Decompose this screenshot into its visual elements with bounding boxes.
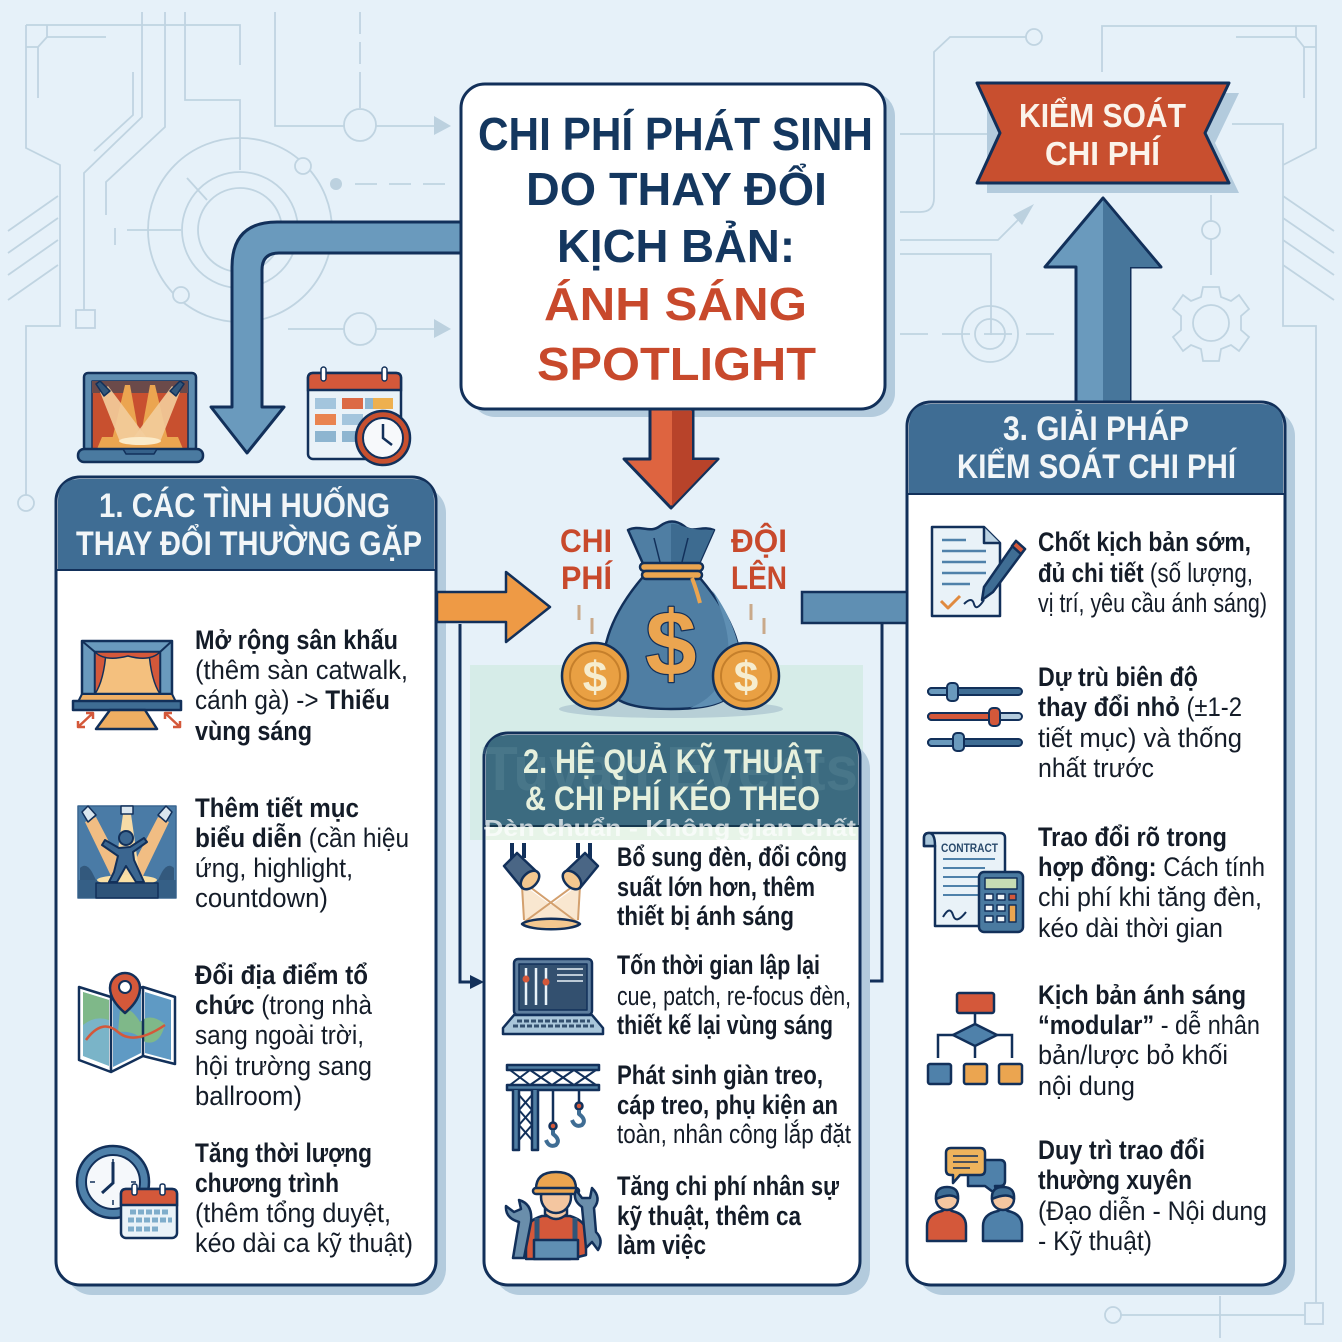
text: regular communication: Duy trì trao đổi	[1038, 1135, 1205, 1165]
text: expand stage: cánh gà) -> Thiếu	[195, 685, 390, 715]
text: change venue	[195, 960, 373, 1111]
text: extra performances: ứng, highlight,	[195, 853, 353, 883]
icon: sliders	[928, 683, 1022, 751]
text: reprogramming time	[617, 950, 851, 1040]
label: đội lên: LÊN	[731, 560, 787, 596]
text: extra performances: biểu diễn (cần hiệu	[195, 822, 409, 853]
text: regular communication: thường xuyên	[1038, 1165, 1192, 1195]
panel 2 header	[482, 735, 860, 841]
text: extra truss: toàn, nhân công lắp đặt	[617, 1118, 851, 1149]
panel 3 header: 3. GIẢI PHÁP	[1003, 410, 1189, 448]
text: extra performances: Thêm tiết mục	[195, 793, 359, 823]
icon: contract and calculator	[924, 833, 1023, 932]
icon: money bag with coins: $	[734, 653, 758, 702]
arrow: panel 1 to cost bag	[437, 572, 550, 642]
title panel: DO THAY ĐỔI	[526, 163, 827, 215]
panel 3 header	[907, 404, 1285, 494]
arrow: title to panel 1	[211, 222, 462, 453]
panel 1 header: 1. CÁC TÌNH HUỐNG	[99, 486, 390, 525]
icon: money bag with coins: $	[583, 653, 607, 702]
watermark tint	[470, 665, 863, 840]
panel 1 header: THAY ĐỔI THƯỜNG GẶP	[76, 525, 422, 563]
banner: cost control	[977, 83, 1239, 193]
icon: calendar with clock	[308, 367, 410, 465]
text: change venue: sang ngoài trời,	[195, 1020, 364, 1050]
title panel	[461, 84, 895, 417]
text: longer programme: kéo dài ca kỹ thuật)	[195, 1228, 413, 1258]
title panel: KỊCH BẢN:	[557, 220, 795, 272]
banner: cost control: KIỂM SOÁT	[1019, 97, 1186, 134]
panel 2 header: & CHI PHÍ KÉO THEO	[525, 780, 820, 818]
text: clear contract: Trao đổi rõ trong	[1038, 822, 1227, 852]
text: crew cost: Tăng chi phí nhân sự	[617, 1171, 839, 1201]
icon: performer on stage	[78, 806, 176, 898]
text: small change margin: Dự trù biên độ	[1038, 662, 1198, 692]
text: extra truss	[617, 1060, 851, 1149]
title panel: CHI PHÍ PHÁT SINH	[478, 108, 873, 160]
text: crew cost: làm việc	[617, 1230, 706, 1260]
text: crew cost	[617, 1171, 839, 1260]
text: small change margin	[1038, 662, 1242, 783]
label: chi phí	[560, 523, 613, 596]
icon: two people talking	[927, 1148, 1022, 1241]
text: modular script: nội dung	[1038, 1071, 1135, 1101]
label: đội lên: ĐỘI	[731, 523, 787, 559]
text: clear contract	[1038, 822, 1265, 943]
panel 2 header: Đèn chuẩn - Không gian chất	[484, 815, 856, 841]
text: clear contract: hợp đồng: Cách tính	[1038, 852, 1265, 882]
text: change venue: chức (trong nhà	[195, 990, 373, 1020]
text: finalize script early: đủ chi tiết (số lượng,	[1038, 558, 1253, 588]
icon: money bag with coins: $	[645, 593, 697, 695]
text: extra performances	[195, 793, 409, 913]
panel 1: common change situations	[56, 477, 446, 1295]
text: clear contract: kéo dài thời gian	[1038, 913, 1223, 943]
text: more lights	[617, 842, 847, 931]
title panel: ÁNH SÁNG	[544, 278, 807, 330]
panel 3: cost control solutions	[907, 402, 1295, 1295]
icon: flowchart	[928, 993, 1022, 1084]
label: chi phí: CHI	[560, 523, 612, 559]
connector: panel 1 to panel 2	[460, 624, 484, 989]
panel 2 header: Tuvan Events	[482, 735, 858, 804]
icon: contract and calculator: CONTRACT	[941, 841, 999, 855]
text: change venue: Đổi địa điểm tổ	[195, 960, 368, 990]
text: more lights: suất lớn hơn, thêm	[617, 872, 815, 902]
text: small change margin: nhất trước	[1038, 753, 1154, 783]
panel 2: technical consequences and costs	[482, 733, 870, 1295]
arrow: up to cost control	[1045, 198, 1161, 402]
text: regular communication: (Đạo diễn - Nội dung	[1038, 1195, 1267, 1226]
text: expand stage: Mở rộng sân khấu	[195, 625, 398, 655]
text: finalize script early: vị trí, yêu cầu ánh sáng)	[1038, 588, 1267, 618]
text: modular script: Kịch bản ánh sáng	[1038, 980, 1246, 1010]
icon: technician with wrenches	[506, 1172, 601, 1259]
icon: map with pin	[79, 973, 175, 1072]
text: clear contract: chi phí khi tăng đèn,	[1038, 882, 1262, 912]
banner: cost control: CHI PHÍ	[1045, 135, 1161, 172]
icon: laptop with stage lights	[78, 373, 203, 462]
text: modular script	[1038, 980, 1260, 1101]
text: longer programme: (thêm tổng duyệt,	[195, 1198, 391, 1228]
text: expand stage: (thêm sàn catwalk,	[195, 655, 408, 685]
icon: document and pen	[932, 527, 1025, 616]
label: chi phí: PHÍ	[561, 560, 613, 596]
connector: cost bag to panel 3	[802, 592, 907, 981]
text: expand stage	[195, 625, 408, 746]
icon: truss with hooks	[507, 1065, 599, 1150]
text: regular communication	[1038, 1135, 1267, 1256]
text: modular script: bản/lược bỏ khối	[1038, 1040, 1228, 1070]
text: longer programme: Tăng thời lượng	[195, 1138, 372, 1168]
text: modular script: “modular” - dễ nhân	[1038, 1009, 1260, 1040]
text: small change margin: thay đổi nhỏ (±1-2	[1038, 692, 1242, 722]
text: extra truss: cáp treo, phụ kiện an	[617, 1090, 838, 1120]
text: change venue: hội trường sang	[195, 1051, 372, 1081]
icon: money bag with coins	[559, 522, 783, 718]
panel 1 header	[56, 479, 436, 570]
icon: laptop with faders	[503, 959, 603, 1034]
text: extra truss: Phát sinh giàn treo,	[617, 1060, 823, 1090]
panel 2 header: 2. HỆ QUẢ KỸ THUẬT	[523, 743, 822, 781]
text: finalize script early	[1038, 527, 1267, 618]
text: finalize script early: Chốt kịch bản sớm,	[1038, 527, 1251, 557]
text: longer programme	[195, 1138, 413, 1258]
title panel: SPOTLIGHT	[537, 338, 816, 390]
text: longer programme: chương trình	[195, 1168, 339, 1198]
icon: clock and calendar	[77, 1146, 177, 1238]
text: reprogramming time: thiết kế lại vùng sáng	[617, 1010, 833, 1040]
text: more lights: Bổ sung đèn, đổi công	[617, 842, 847, 872]
panel 3 header: KIỂM SOÁT CHI PHÍ	[957, 448, 1237, 486]
text: expand stage: vùng sáng	[195, 716, 312, 746]
icon: stage	[73, 641, 181, 729]
arrow: title to cost bag	[624, 409, 718, 508]
text: regular communication: - Kỹ thuật)	[1038, 1226, 1152, 1256]
icon: spotlights	[504, 843, 598, 929]
text: change venue: ballroom)	[195, 1081, 302, 1111]
text: reprogramming time: cue, patch, re-focus đèn,	[617, 981, 851, 1011]
background arrowheads	[330, 116, 1034, 338]
text: reprogramming time: Tốn thời gian lập lại	[617, 950, 820, 980]
text: crew cost: kỹ thuật, thêm ca	[617, 1201, 802, 1231]
text: small change margin: tiết mục) và thống	[1038, 723, 1242, 753]
label: đội lên	[731, 523, 787, 596]
text: more lights: thiết bị ánh sáng	[617, 901, 794, 931]
text: extra performances: countdown)	[195, 883, 328, 913]
